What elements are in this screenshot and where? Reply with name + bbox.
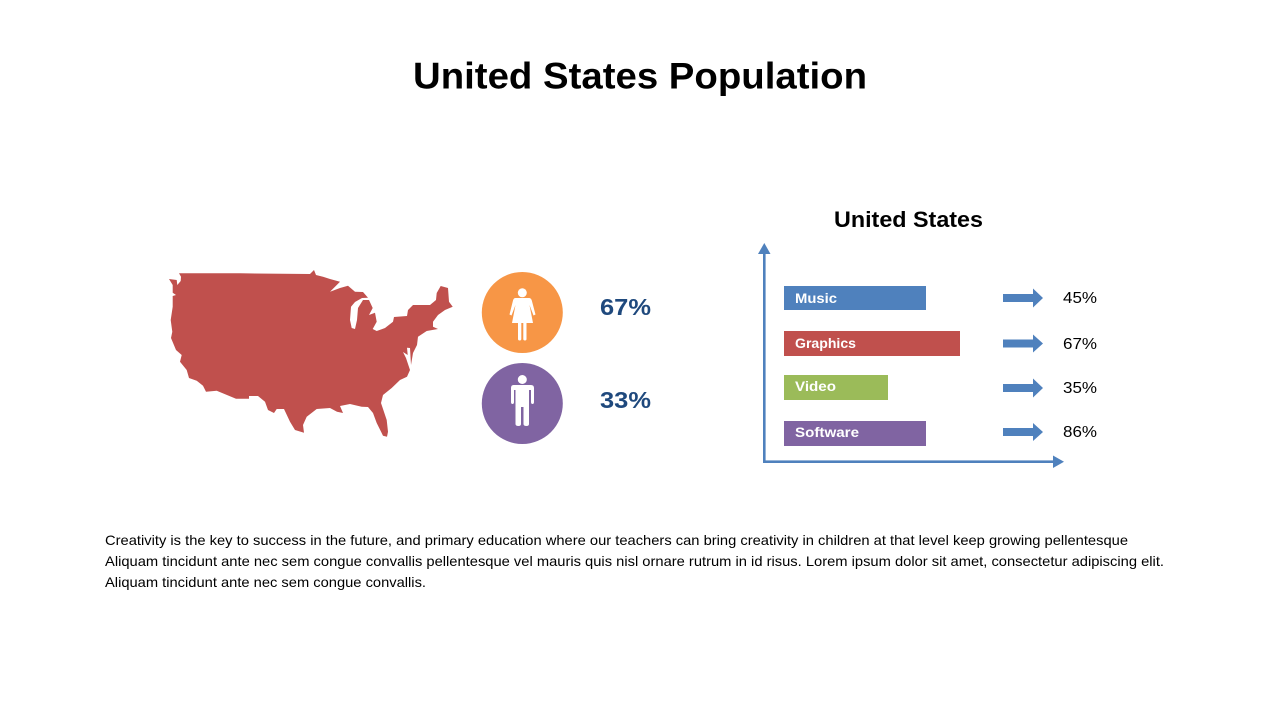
map: contiguous United States	[169, 270, 453, 437]
value: Graphics: 67%	[1063, 336, 1097, 353]
icon: female figure in orange circle	[482, 272, 563, 353]
icon: male figure in purple circle	[482, 363, 563, 444]
bar: Music: Music	[795, 291, 838, 306]
arrow: Music	[1003, 288, 1043, 308]
value: Video: 35%	[1063, 380, 1097, 397]
chart heading: United States	[834, 207, 983, 232]
body text block: Aliquam tincidunt ante nec sem congue convallis.	[105, 575, 426, 590]
bar: Software: Software	[795, 425, 860, 440]
bar: Graphics	[784, 331, 960, 356]
bar: Video: Video	[795, 379, 836, 394]
female percentage: 67%	[600, 294, 651, 320]
body text block: Aliquam tincidunt ante nec sem congue convallis pellentesque vel mauris quis nisl ornare rutrum in id risus. Lorem ipsum dolor sit amet, consectetur adipiscing elit.	[105, 554, 1164, 569]
male percentage: 33%	[600, 387, 651, 413]
bar: Video	[784, 375, 888, 400]
arrow: Video	[1003, 378, 1043, 398]
body text block	[105, 533, 1164, 590]
value: Software: 86%	[1063, 424, 1097, 441]
chart axes	[758, 243, 1064, 468]
bar: Graphics: Graphics	[795, 336, 856, 351]
arrow: Software	[1003, 423, 1043, 441]
bar: Music	[784, 286, 926, 310]
bar: Software	[784, 421, 926, 446]
value: Music: 45%	[1063, 290, 1097, 307]
arrow: Graphics	[1003, 334, 1043, 352]
title: United States Population	[413, 56, 867, 96]
body text block: Creativity is the key to success in the future, and primary education where our teachers can bring creativity in children at that level keep growing pellentesque	[105, 533, 1128, 548]
